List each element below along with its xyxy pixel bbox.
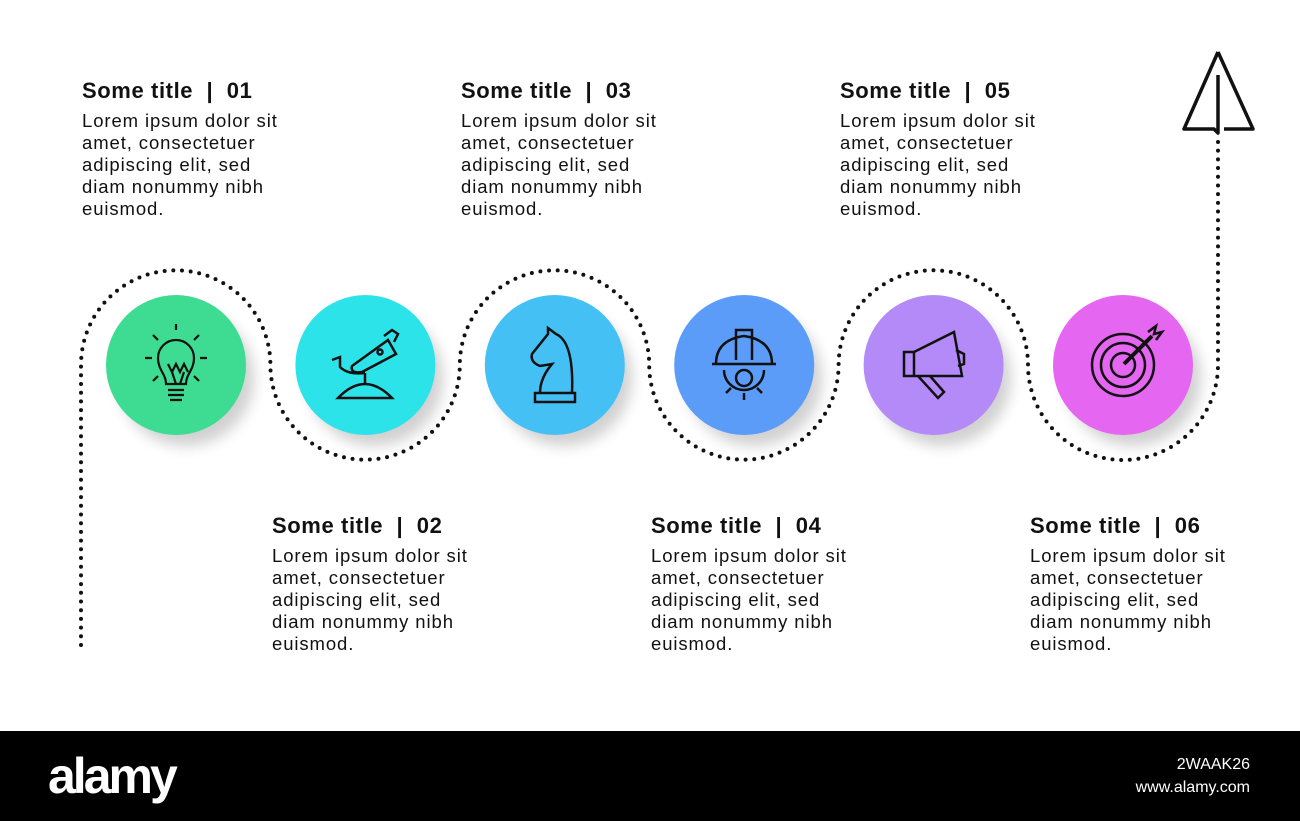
icon: paper plane arrow: [1184, 52, 1253, 133]
text block 06: Lorem ipsum dolor sit amet, consectetuer adipiscing elit, sed diam nonummy nibh euismod.: [1030, 545, 1226, 654]
circle 4: [674, 295, 822, 446]
text block 05: Some title | 05: [840, 78, 1010, 103]
text block 03: Some title | 03: [461, 78, 631, 103]
text block 06: Some title | 06: [1030, 513, 1200, 538]
icon: chess knight: [532, 328, 575, 402]
text block 02: Lorem ipsum dolor sit amet, consectetuer adipiscing elit, sed diam nonummy nibh euismod.: [272, 545, 468, 654]
dotted path: [81, 135, 1218, 645]
footer id: 2WAAK26: [1177, 756, 1250, 773]
text block 05: Lorem ipsum dolor sit amet, consectetuer adipiscing elit, sed diam nonummy nibh euismod.: [840, 110, 1036, 219]
text block 04: Some title | 04: [651, 513, 821, 538]
footer bar: [0, 731, 1300, 821]
circle 3: [485, 295, 632, 446]
footer id: www.alamy.com: [1136, 779, 1250, 796]
circle 6: [1053, 295, 1201, 446]
text block 02: Some title | 02: [272, 513, 442, 538]
icon: hard hat with gear: [712, 330, 776, 400]
icon: megaphone: [904, 332, 964, 398]
text block 01: Lorem ipsum dolor sit amet, consectetuer adipiscing elit, sed diam nonummy nibh euismod.: [82, 110, 278, 219]
text block 01: Some title | 01: [82, 78, 252, 103]
circle 2: [295, 295, 443, 446]
text block 04: Lorem ipsum dolor sit amet, consectetuer adipiscing elit, sed diam nonummy nibh euismod.: [651, 545, 847, 654]
circle 5: [864, 295, 1011, 446]
icon: light bulb: [145, 324, 207, 400]
text block 03: Lorem ipsum dolor sit amet, consectetuer adipiscing elit, sed diam nonummy nibh euismod.: [461, 110, 657, 219]
footer logo: alamy: [48, 748, 175, 804]
circle 1: [106, 295, 254, 446]
icon: target with arrow: [1092, 326, 1162, 396]
footer id: [1136, 756, 1250, 796]
icon: microscope: [332, 330, 398, 398]
